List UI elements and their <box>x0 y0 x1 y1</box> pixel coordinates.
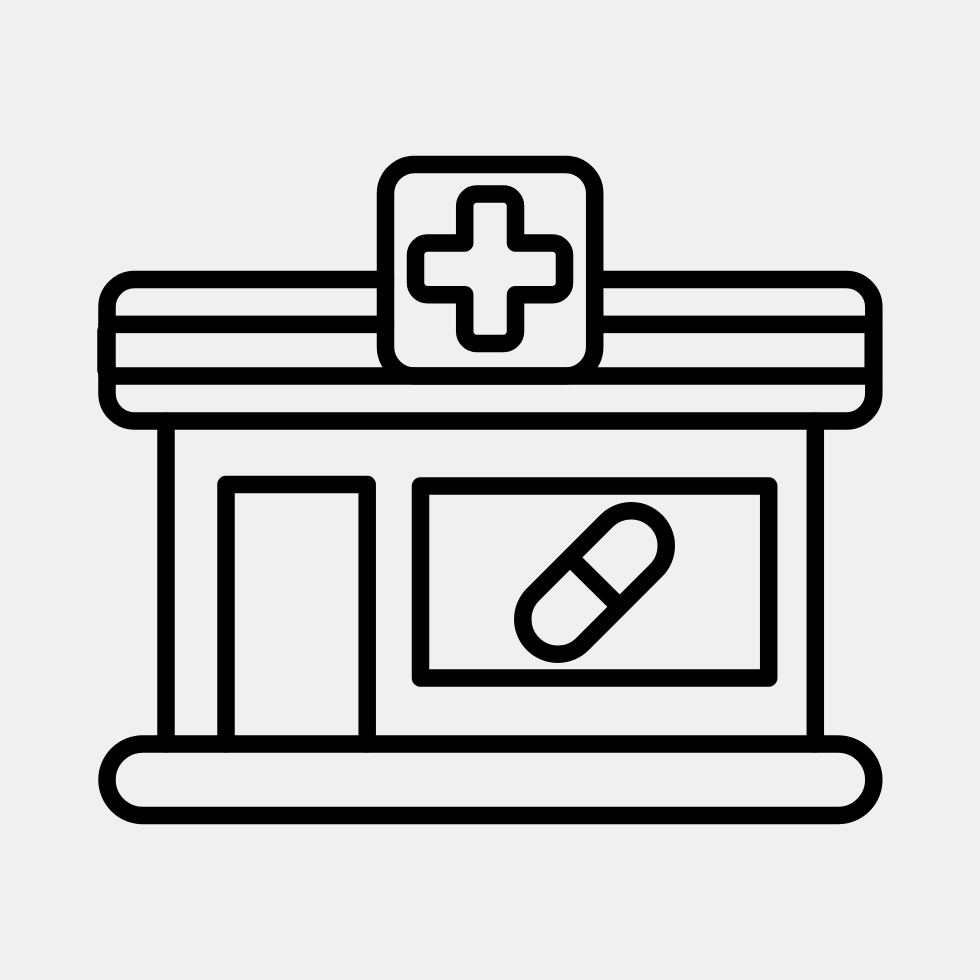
awning roof <box>106 280 874 421</box>
base step <box>107 744 874 816</box>
sign board with cross <box>386 164 595 376</box>
door <box>226 484 367 744</box>
window <box>420 486 769 678</box>
icon: medical cross <box>416 194 564 344</box>
icon: pill capsule <box>523 511 666 654</box>
building walls <box>166 421 815 744</box>
